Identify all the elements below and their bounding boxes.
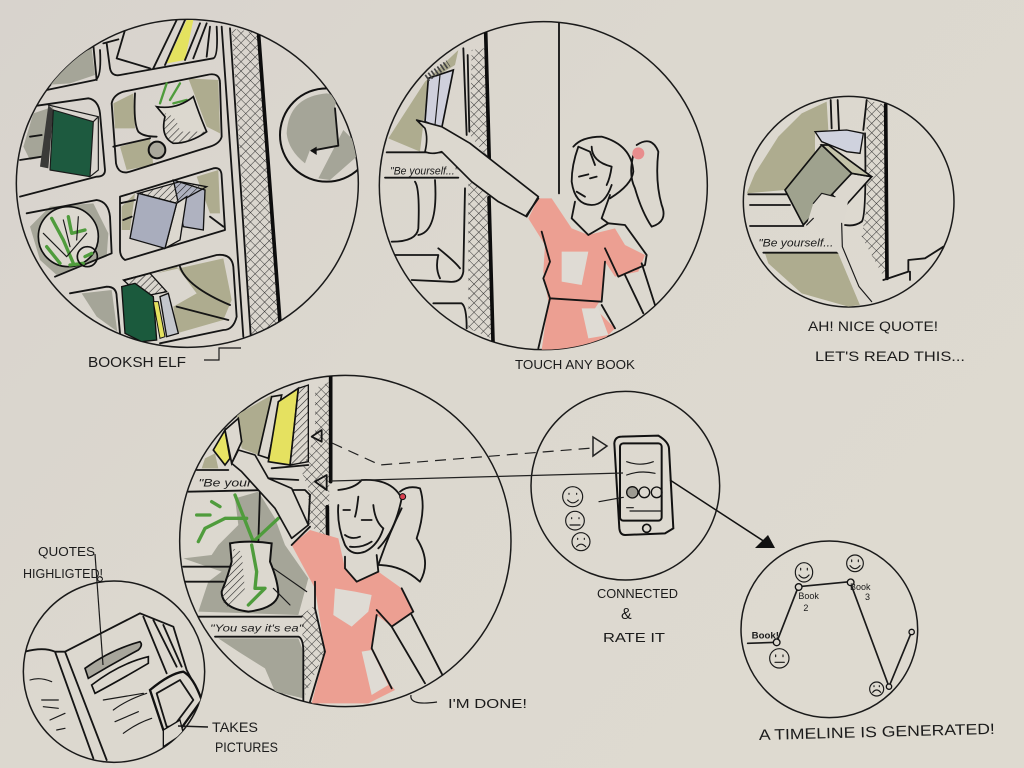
caption: connected and rate it: RATE IT <box>603 630 665 645</box>
quote text: "Be yourself..." <box>390 165 459 177</box>
dress <box>528 198 645 350</box>
caption: nice quote: AH! NICE QUOTE! <box>808 319 938 334</box>
shelves <box>748 100 887 278</box>
vase with plant <box>149 83 207 158</box>
pillar edges <box>222 27 280 337</box>
connection lines <box>331 473 775 548</box>
olive shading <box>747 102 860 307</box>
head and hair <box>338 480 402 553</box>
label: takes pictures: PICTURES <box>215 739 278 755</box>
book labels: 2 <box>803 603 808 613</box>
label: takes pictures: TAKES <box>212 719 258 735</box>
arm <box>417 120 538 217</box>
neck <box>572 195 610 235</box>
pillar hatching <box>232 28 280 335</box>
olive shelf shading <box>23 48 232 333</box>
caption: touch any book: TOUCH ANY BOOK <box>515 357 635 372</box>
olive shading <box>183 395 308 698</box>
green plant ball <box>38 207 98 267</box>
book labels: Book! <box>752 630 779 640</box>
wall clock <box>279 87 358 183</box>
pillar hatching <box>302 382 330 695</box>
pillar edges and triangles <box>312 375 331 542</box>
panel: done reading <box>180 375 511 707</box>
highlighted quote <box>85 642 141 678</box>
label: bookshelf: BOOKSH ELF <box>88 354 186 371</box>
vase and plant <box>197 495 307 612</box>
panel: timeline <box>741 541 918 718</box>
book labels: 3 <box>865 592 870 602</box>
hair tie <box>400 494 406 500</box>
book labels <box>752 582 871 640</box>
panel: connected <box>531 391 720 580</box>
shelf outlines <box>20 27 237 343</box>
open book <box>25 613 202 760</box>
label: takes pictures <box>178 719 278 755</box>
label: bookshelf <box>88 348 241 371</box>
quote one: "Be your <box>198 478 253 490</box>
hand <box>808 194 860 305</box>
green and yellow books <box>122 273 178 342</box>
panel: book with highlights <box>23 581 205 762</box>
olive shading <box>388 50 458 152</box>
label: I'm done: I'M DONE! <box>448 696 527 711</box>
panel: touch any book <box>379 21 707 350</box>
sleeve <box>883 247 943 280</box>
label: quotes highlighted: QUOTES <box>38 544 95 559</box>
dress <box>292 530 413 703</box>
label: quotes highlighted: HIGHLIGTED! <box>23 566 103 581</box>
books <box>213 385 308 465</box>
timeline points <box>773 579 914 689</box>
grey books <box>130 180 207 248</box>
panel: bookshelf <box>16 19 373 347</box>
grey book <box>785 145 872 225</box>
ponytail <box>378 487 425 582</box>
caption: connected and rate it: CONNECTED <box>597 586 678 601</box>
touched book <box>425 63 453 128</box>
text squiggles <box>103 693 152 733</box>
head and hair <box>572 137 633 205</box>
green book <box>40 105 98 177</box>
arm raised <box>232 450 308 538</box>
caption: timeline: A TIMELINE IS GENERATED! <box>759 721 995 744</box>
book labels: Book <box>798 591 819 601</box>
pillar hatching <box>862 100 886 274</box>
dress highlights <box>562 252 608 338</box>
dress highlights <box>333 588 388 695</box>
pillar hatching <box>468 48 492 338</box>
book labels: Book <box>850 582 871 592</box>
dress and arm lines <box>292 527 443 702</box>
dress and arm lines <box>527 198 655 348</box>
label: I'm done <box>411 695 527 711</box>
phone <box>614 436 673 535</box>
caption: nice quote: LET'S READ THIS... <box>815 348 965 364</box>
yellow book <box>153 20 207 68</box>
pillar edges <box>463 21 559 342</box>
panel: nice quote <box>743 96 954 307</box>
caption: nice quote <box>808 319 965 364</box>
shelf lines <box>385 152 467 328</box>
second highlight <box>92 657 148 693</box>
hair tie <box>632 147 644 159</box>
shelves <box>183 465 310 705</box>
back books <box>815 130 863 153</box>
label: quotes highlighted <box>23 544 103 665</box>
caption: connected and rate it: & <box>621 606 632 623</box>
dashed arrow to phone <box>332 437 607 465</box>
neck <box>345 555 378 582</box>
phone camera <box>150 672 202 747</box>
quote text: "Be yourself... <box>758 238 833 250</box>
quote two: "You say it's ea" <box>210 624 304 635</box>
caption: connected and rate it <box>597 586 678 645</box>
hand lines <box>807 193 872 302</box>
smiley faces <box>563 487 623 551</box>
ponytail <box>631 141 664 227</box>
timeline faces <box>770 555 884 696</box>
